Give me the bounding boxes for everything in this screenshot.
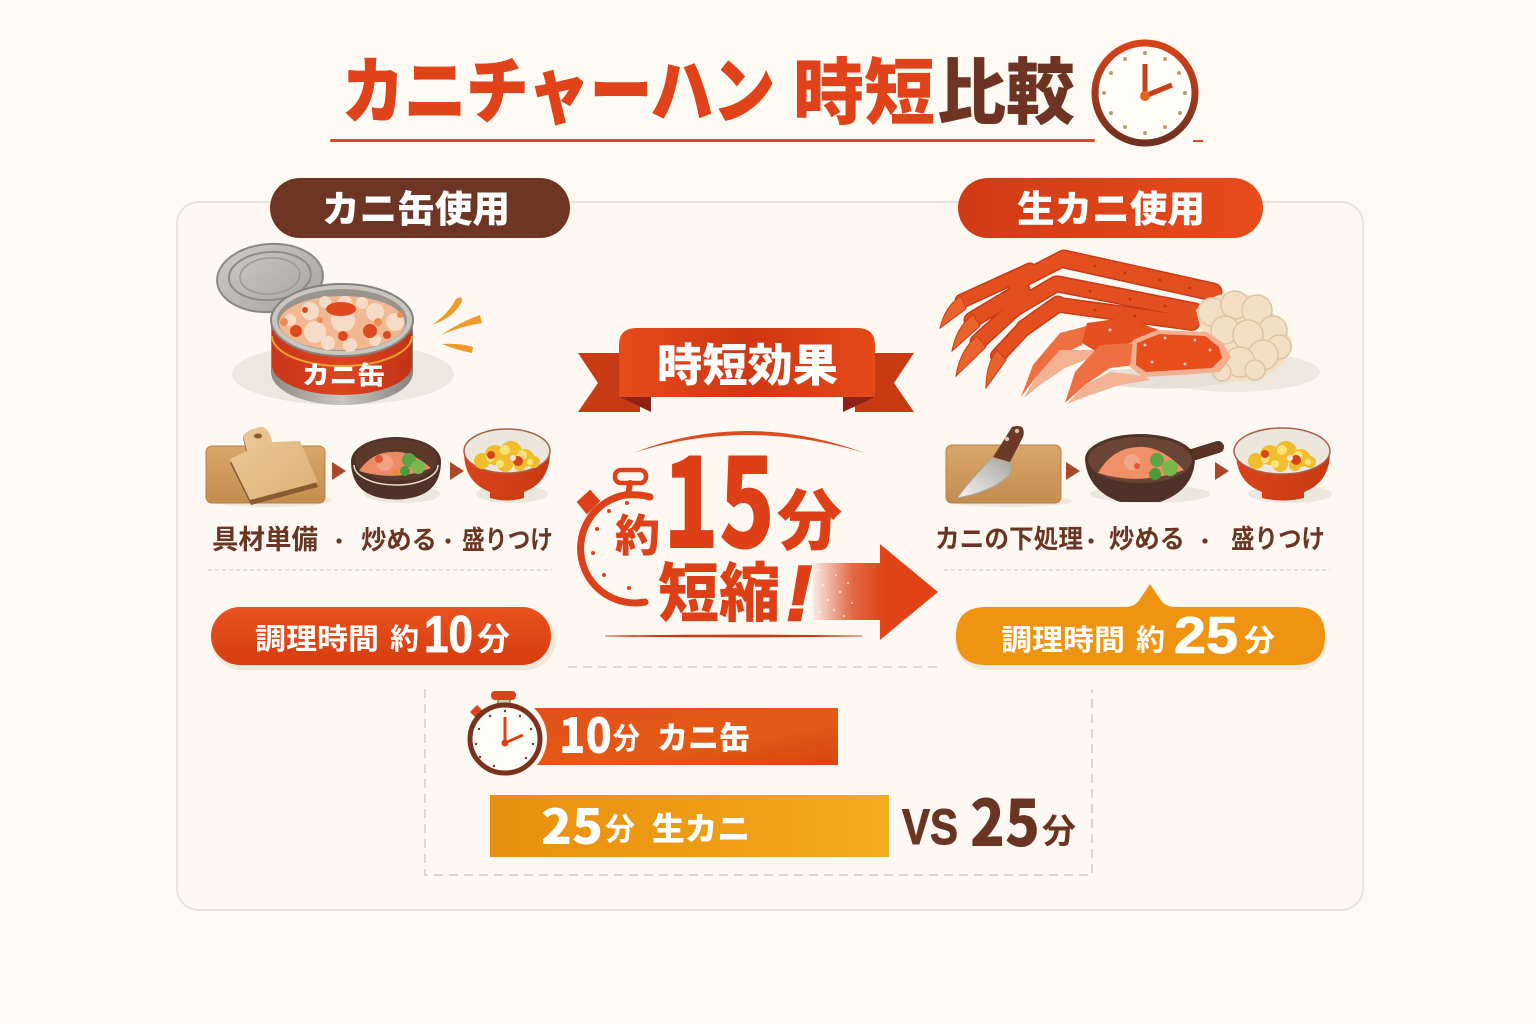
time pill: fresh crab: 25 <box>1174 607 1238 665</box>
icon: sparkle accent <box>432 297 482 353</box>
panel: canned crab column <box>206 178 570 670</box>
icon: crab legs <box>940 259 1320 404</box>
heading pill: canned crab: カニ缶使用 <box>322 179 510 233</box>
icon: crab can: カニ缶 <box>302 356 385 392</box>
arrow: step 1 <box>332 462 346 480</box>
crab meat filling <box>279 296 405 352</box>
bar: canned crab 10 min: 分 <box>613 714 640 758</box>
icon: frying pan with stir-fry <box>1085 434 1218 503</box>
label: vs 25 minutes <box>902 773 1076 865</box>
headline number: 15 minutes: 15 <box>663 404 775 584</box>
step labels: fresh crab: 盛りつけ <box>1231 519 1325 556</box>
ribbon banner <box>578 328 914 412</box>
step labels: canned crab <box>212 518 553 557</box>
step labels: fresh crab: 炒める <box>1109 519 1185 556</box>
title: 時短 <box>793 34 935 139</box>
time pill: fresh crab: 分 <box>1244 616 1275 660</box>
bar: canned crab 10 min: 10 <box>559 697 612 767</box>
time pill: canned crab: 約 <box>390 616 419 658</box>
step labels: fresh crab <box>935 519 1325 556</box>
time pill: fresh crab: 約 <box>1136 617 1165 659</box>
bar: fresh crab 25 min <box>490 788 889 858</box>
icon: stopwatch <box>465 691 547 779</box>
step labels: fresh crab: カニの下処理 <box>935 519 1083 556</box>
time pill: canned crab: 10 <box>424 606 473 664</box>
label: vs 25 minutes: 分 <box>1042 804 1076 853</box>
icon: red bowl with fried rice <box>1234 428 1332 503</box>
bar: canned crab 10 min <box>528 697 838 767</box>
time pill: canned crab <box>211 606 556 670</box>
icon: red bowl with fried rice <box>464 429 550 503</box>
label: vs 25 minutes: 25 <box>970 773 1040 865</box>
time pill: fresh crab: 調理時間 <box>1001 617 1125 659</box>
time pill: canned crab: 調理時間 <box>255 616 379 658</box>
arrow: step 2 <box>450 462 464 480</box>
time pill: canned crab: 分 <box>477 614 510 660</box>
panel: time bar chart <box>425 689 1092 875</box>
time pill: fresh crab <box>955 584 1327 670</box>
decorative underline <box>605 635 862 637</box>
label: approx: 約 <box>615 500 660 564</box>
title: カニチャーハン <box>342 33 775 138</box>
title: 比較 <box>937 34 1075 139</box>
headline: shorten: 短縮 <box>658 543 780 635</box>
heading pill: fresh crab: 生カニ使用 <box>1017 179 1205 233</box>
title <box>342 33 1075 139</box>
heading pill: canned crab <box>270 178 570 238</box>
icon: cutting boards <box>206 427 332 507</box>
headline number: 15 minutes: 分 <box>777 468 842 564</box>
crab body meat <box>1196 291 1292 381</box>
panel: center effect <box>578 328 938 640</box>
bar: fresh crab 25 min: 生カニ <box>652 804 750 850</box>
step labels: canned crab: 盛りつけ <box>462 520 553 557</box>
bar: canned crab 10 min: カニ缶 <box>657 713 750 758</box>
arrow: step 1 <box>1066 462 1080 480</box>
bar: fresh crab 25 min: 分 <box>605 804 635 849</box>
panel: fresh crab column <box>935 178 1332 670</box>
title underline <box>330 139 1203 142</box>
icon: clock <box>1095 43 1195 143</box>
crab claws <box>1021 317 1231 404</box>
panel: main comparison <box>177 202 1363 910</box>
icon: dark bowl with stir-fry <box>351 437 441 503</box>
decorative arc <box>633 431 865 453</box>
arrow: time saved <box>813 544 938 640</box>
icon: crab can <box>215 240 454 405</box>
ribbon banner: 時短効果 <box>657 329 838 394</box>
icon: knife on cutting board <box>946 426 1072 507</box>
headline: shorten: ! <box>786 549 812 637</box>
bar: fresh crab 25 min: 25 <box>541 788 603 858</box>
step labels: canned crab: 具材単備 <box>212 518 318 557</box>
icon: stopwatch outline <box>578 470 650 603</box>
heading pill: fresh crab <box>958 178 1263 238</box>
arrow: step 2 <box>1215 462 1229 480</box>
step labels: canned crab: 炒める <box>361 520 437 557</box>
label: vs 25 minutes: VS <box>902 799 958 855</box>
